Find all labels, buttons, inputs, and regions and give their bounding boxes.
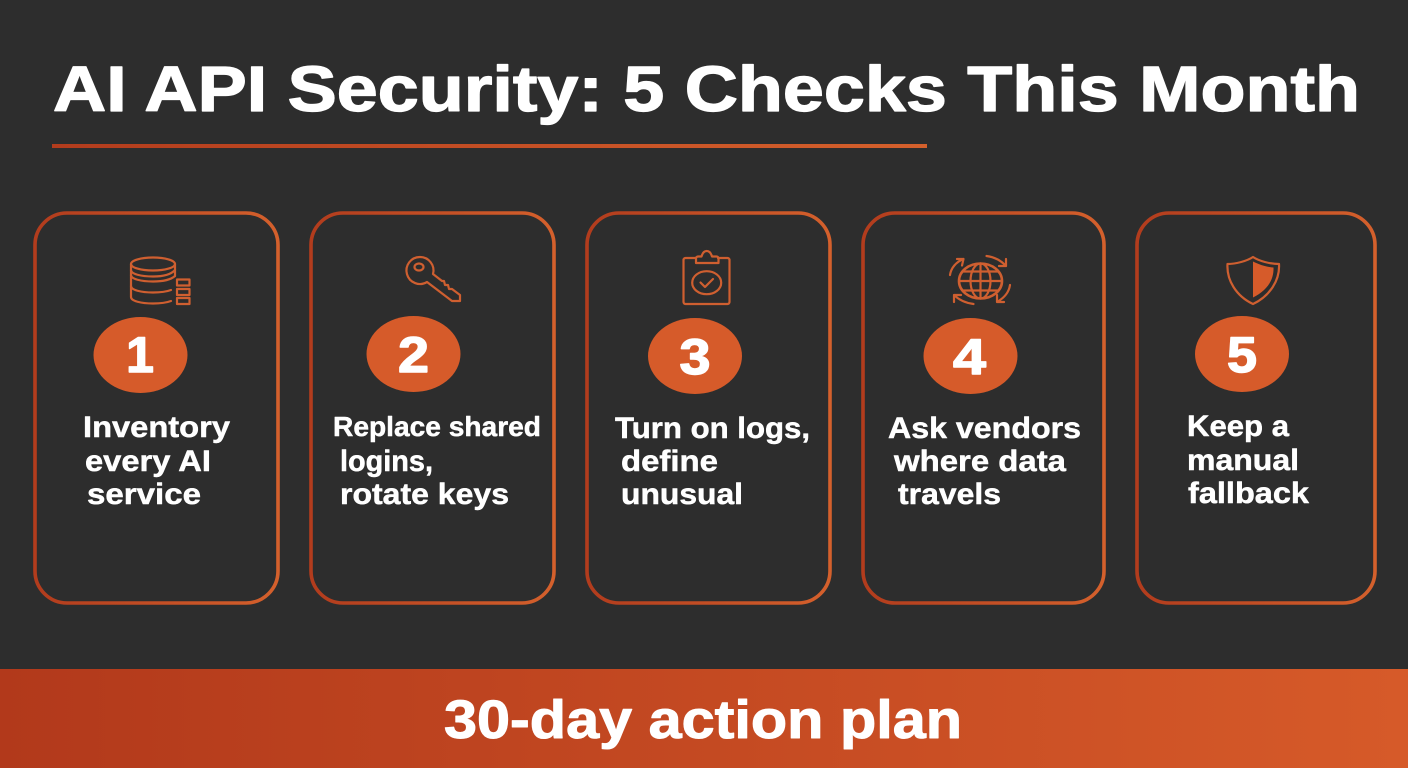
footer banner (0, 669, 1408, 768)
text: check 5 (1187, 410, 1309, 510)
text: check 3: Turn on logs, (615, 412, 810, 445)
number badge 1 (94, 317, 188, 393)
text: check 2: Replace shared (333, 411, 541, 442)
icon: key (406, 257, 460, 301)
text: check 2: rotate keys (340, 478, 509, 511)
panel: check 1 (35, 213, 278, 603)
text: check 1: Inventory (83, 411, 230, 444)
number badge 2 (366, 316, 460, 392)
panel: check 2 (311, 213, 554, 603)
icon: globe with arrows (950, 256, 1010, 304)
text: check 4: Ask vendors (888, 412, 1081, 445)
banner text: 30-day action plan (444, 690, 962, 750)
text: check 3: unusual (621, 478, 743, 511)
icon: clipboard check (684, 251, 730, 304)
number badge 4: 4 (953, 329, 986, 385)
panel: check 3 (587, 213, 830, 603)
number badge 2: 2 (398, 327, 429, 383)
panel: check 5 (1137, 213, 1375, 603)
icon: shield (1227, 257, 1279, 304)
number badge 5 (1195, 316, 1289, 392)
number badge 5: 5 (1227, 327, 1257, 383)
text: check 3 (615, 412, 810, 511)
title: AI API Security: 5 Checks This Month (53, 53, 1360, 125)
number badge 1: 1 (126, 327, 154, 383)
title underline (52, 144, 927, 148)
text: check 3: define (621, 445, 718, 478)
text: check 4: where data (893, 445, 1066, 478)
text: check 1: every AI (85, 445, 211, 478)
text: check 4: travels (898, 478, 1001, 511)
text: check 4 (888, 412, 1081, 511)
number badge 4 (924, 318, 1018, 394)
text: check 5: manual (1187, 444, 1299, 477)
number badge 3: 3 (680, 329, 710, 385)
icon: database (131, 258, 190, 304)
text: check 1: service (87, 478, 201, 511)
text: check 5: Keep a (1187, 410, 1289, 443)
panel: check 4 (863, 213, 1104, 603)
text: check 2 (333, 411, 541, 511)
text: check 1 (83, 411, 230, 511)
number badge 3 (648, 318, 742, 394)
text: check 5: fallback (1188, 477, 1309, 510)
text: check 2: logins, (340, 445, 433, 478)
